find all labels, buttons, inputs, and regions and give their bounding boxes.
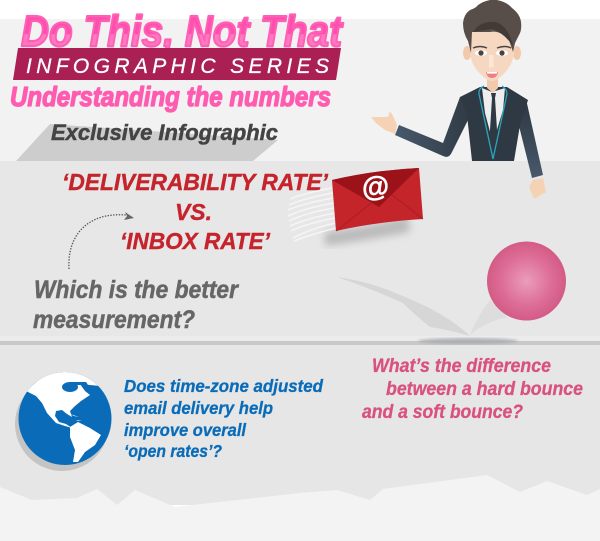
ears xyxy=(463,46,471,60)
banner: infographic series xyxy=(13,48,341,80)
character: businessman xyxy=(371,0,546,199)
envelope shadow xyxy=(325,216,410,246)
globe shadow xyxy=(15,377,109,471)
question: time-zone delivery: improve overall xyxy=(124,420,247,440)
hair shadow xyxy=(473,22,513,46)
middle background xyxy=(0,161,600,341)
tie xyxy=(490,93,497,146)
question: which is the better measurement: measurement? xyxy=(33,306,195,334)
arm left xyxy=(395,97,474,157)
torso xyxy=(460,87,528,161)
heading: deliverability vs inbox xyxy=(62,169,328,254)
title: Do This, Not That: Do This, Not That xyxy=(21,7,344,56)
nose xyxy=(489,55,494,68)
hair xyxy=(463,0,521,53)
label: exclusive infographic: Exclusive Infographic xyxy=(51,120,278,145)
brows xyxy=(473,46,487,48)
envelope flap xyxy=(332,168,419,207)
icon: globe xyxy=(15,368,112,471)
banner: infographic series: INFOGRAPHIC SERIES xyxy=(26,55,329,78)
question: time-zone delivery xyxy=(124,376,323,461)
continents xyxy=(26,368,101,462)
heading: deliverability vs inbox: ‘DELIVERABILITY RATE’ xyxy=(62,169,328,195)
arrow: dotted curve xyxy=(69,212,134,269)
icon: email envelope xyxy=(288,168,423,246)
arm right xyxy=(518,99,543,178)
eyes xyxy=(475,50,487,56)
heading: deliverability vs inbox: ‘INBOX RATE’ xyxy=(120,228,270,254)
icon: bouncing ball xyxy=(337,242,566,344)
envelope body xyxy=(332,168,423,231)
hand left xyxy=(371,111,397,134)
question: which is the better measurement xyxy=(33,276,239,334)
question: hard vs soft bounce: between a hard bounce xyxy=(386,379,583,400)
shirt xyxy=(482,88,505,143)
neck xyxy=(487,74,498,93)
heading: deliverability vs inbox: VS. xyxy=(175,199,212,225)
question: which is the better measurement: Which is the better xyxy=(34,276,239,304)
label: exclusive infographic xyxy=(16,120,278,161)
speed lines xyxy=(288,188,336,241)
header background xyxy=(0,19,600,161)
lower background xyxy=(0,345,600,505)
question: time-zone delivery: Does time-zone adjusted xyxy=(124,376,323,396)
at sign: @ xyxy=(361,170,390,203)
globe ocean xyxy=(18,372,112,465)
question: time-zone delivery: ‘open rates’? xyxy=(124,441,222,461)
question: time-zone delivery: email delivery help xyxy=(124,398,273,418)
question: hard vs soft bounce xyxy=(362,356,583,423)
hand right xyxy=(529,178,546,199)
subtitle: understanding the numbers: Understanding the numbers xyxy=(10,81,331,112)
question: hard vs soft bounce: What’s the difference xyxy=(372,356,551,377)
torn paper footer xyxy=(0,475,600,541)
lanyard xyxy=(479,86,507,159)
question: hard vs soft bounce: and a soft bounce? xyxy=(362,402,523,423)
face xyxy=(470,30,514,81)
mouth xyxy=(486,72,498,78)
